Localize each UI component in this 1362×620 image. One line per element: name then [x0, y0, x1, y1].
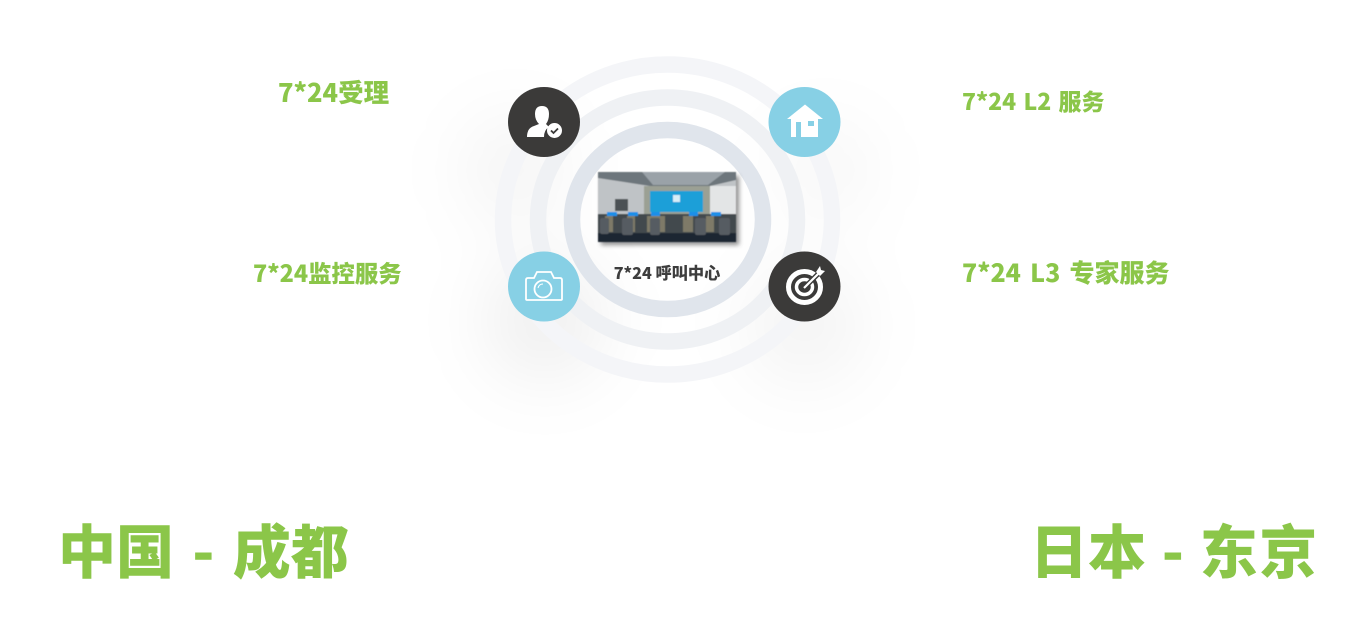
icon: house	[768, 87, 840, 157]
label: 7*24 monitoring service: 7*24监控服务	[253, 255, 402, 289]
call center room photo	[598, 172, 739, 245]
concentric rings	[503, 64, 832, 374]
label: 7*24 L2 service: 7*24 L2 服务	[962, 83, 1104, 117]
icon: camera	[508, 252, 580, 322]
icon: target with arrow	[768, 252, 840, 322]
heading: Japan Tokyo: 日本 - 东京	[1030, 506, 1317, 590]
soft background shadows	[460, 115, 875, 385]
heading: China Chengdu: 中国 - 成都	[58, 506, 349, 590]
label: 7*24 L3 expert service: 7*24 L3 专家服务	[962, 254, 1170, 290]
icon: user with check	[508, 87, 580, 157]
label: 7*24 acceptance: 7*24受理	[278, 73, 389, 110]
center label: 7*24 呼叫中心	[614, 260, 720, 284]
